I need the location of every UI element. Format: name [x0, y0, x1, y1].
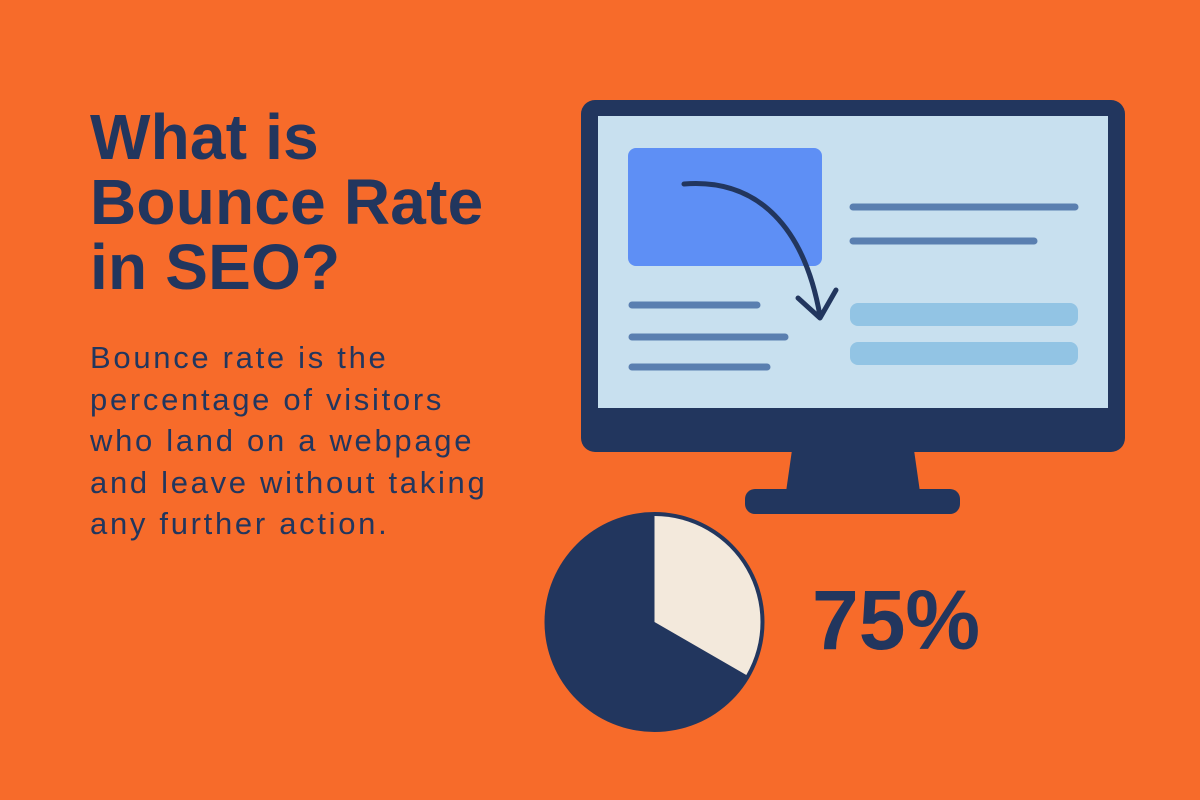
blue content block — [628, 148, 822, 266]
arrow — [684, 184, 836, 318]
text block: definition: any further action. — [90, 506, 389, 541]
title — [90, 101, 483, 303]
title: What is — [90, 101, 319, 173]
pie chart — [544, 512, 764, 732]
text block: definition: and leave without taking — [90, 464, 487, 500]
text block: definition: percentage of visitors — [90, 382, 444, 416]
title: in SEO? — [90, 231, 340, 303]
percentage label: 75% — [812, 573, 980, 667]
monitor frame — [581, 100, 1125, 514]
title: Bounce Rate — [90, 166, 483, 238]
text lines — [632, 207, 1075, 367]
text block: definition — [90, 340, 487, 541]
screen — [598, 116, 1108, 408]
text block: definition: Bounce rate is the — [90, 340, 388, 375]
text block: definition: who land on a webpage — [90, 423, 474, 458]
light bars — [850, 303, 1078, 365]
